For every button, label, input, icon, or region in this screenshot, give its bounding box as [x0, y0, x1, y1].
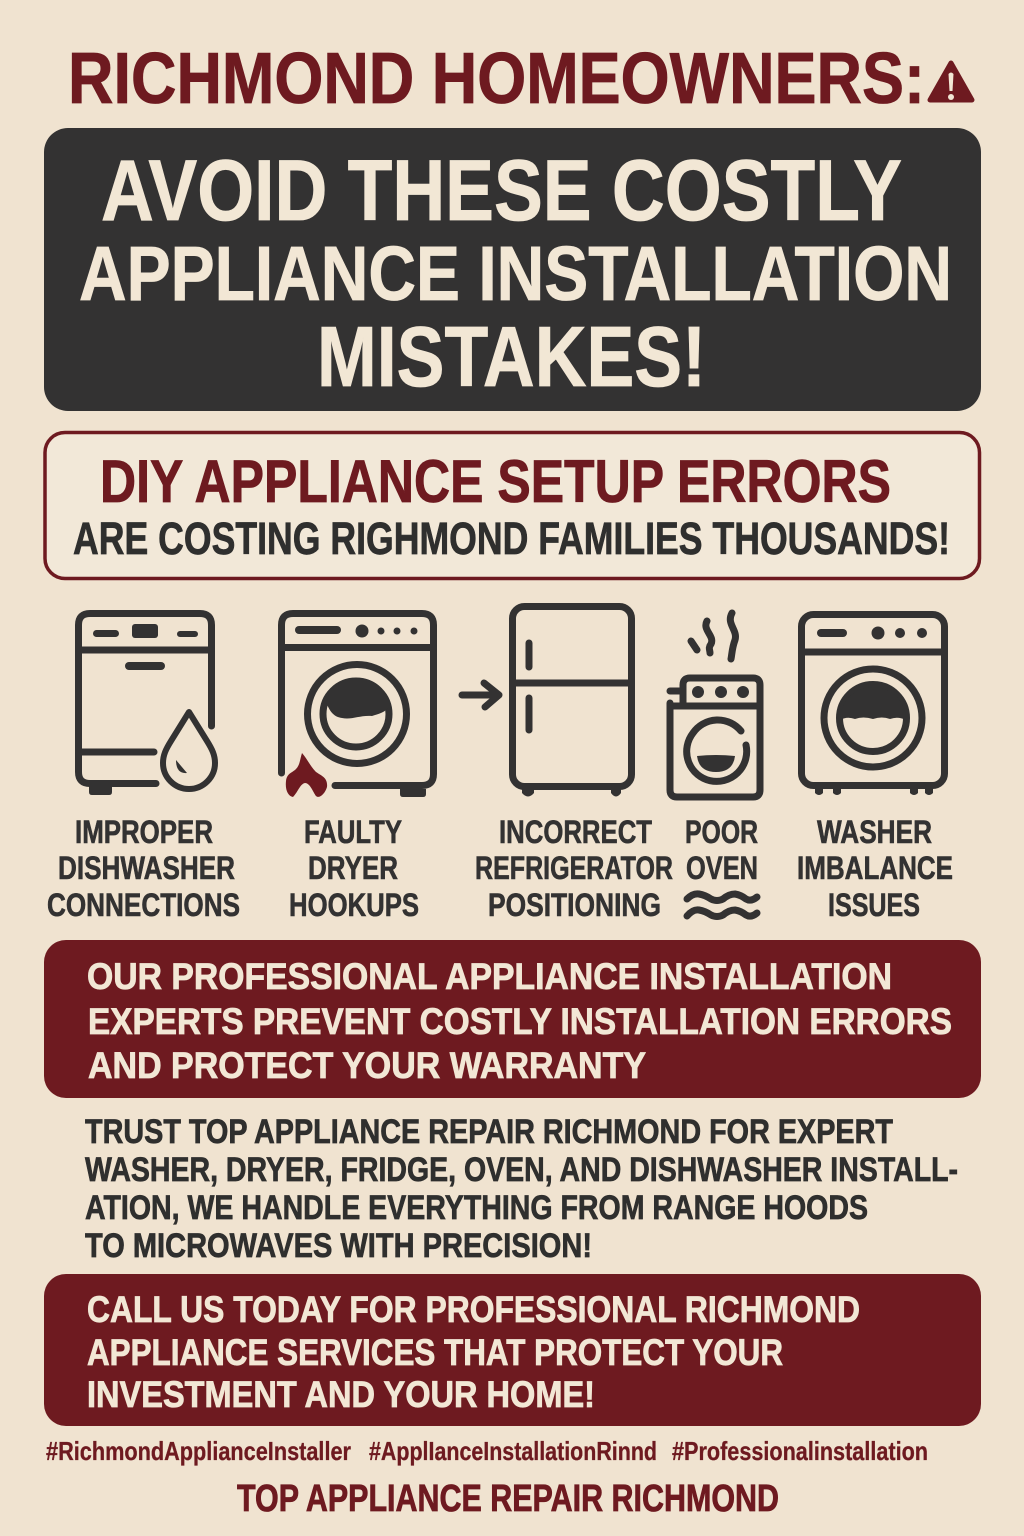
label: dryer hookups: DRYER	[308, 850, 398, 886]
label: refrigerator positioning	[475, 814, 673, 923]
panel: call to action: APPLIANCE SERVICES THAT PROTECT YOUR	[87, 1331, 783, 1373]
label: washer imbalance: ISSUES	[828, 887, 920, 923]
icon: refrigerator	[512, 606, 632, 796]
panel: headline	[44, 128, 981, 411]
title: RICHMOND HOMEOWNERS:	[68, 39, 925, 119]
panel: professional experts: OUR PROFESSIONAL APPLIANCE INSTALLATION	[87, 955, 892, 997]
hashtags: #RichmondApplianceInstaller	[46, 1436, 351, 1466]
label: washer imbalance	[797, 814, 953, 923]
icon: dryer with flame	[282, 614, 434, 797]
label: washer imbalance: IMBALANCE	[797, 850, 953, 886]
panel: headline: AVOID THESE COSTLY	[101, 143, 902, 239]
hashtags	[46, 1436, 928, 1466]
label: dishwasher connections	[47, 814, 240, 923]
icon: warning triangle	[930, 63, 972, 100]
hashtags: #Professionalinstallation	[672, 1436, 928, 1466]
label: dishwasher connections: DISHWASHER	[58, 850, 235, 886]
label: dishwasher connections: CONNECTIONS	[47, 887, 240, 923]
footer brand name: TOP APPLIANCE REPAIR RICHMOND	[237, 1478, 779, 1520]
label: poor oven: OVEN	[686, 850, 758, 886]
icon: oven with steam	[670, 613, 760, 797]
label: refrigerator positioning: POSITIONING	[488, 887, 661, 923]
panel: DIY errors callout	[45, 432, 980, 578]
panel: headline: MISTAKES!	[317, 310, 706, 405]
label: refrigerator positioning: REFRIGERATOR	[475, 850, 673, 886]
panel: DIY errors callout: DIY APPLIANCE SETUP ERRORS	[100, 448, 891, 515]
label: dryer hookups: FAULTY	[304, 814, 402, 850]
panel: call to action: CALL US TODAY FOR PROFESSIONAL RICHMOND	[87, 1288, 860, 1330]
text block: trust statement: ATION, WE HANDLE EVERYTHING FROM RANGE HOODS	[85, 1189, 868, 1227]
panel: call to action	[44, 1274, 981, 1426]
icon: flame	[286, 753, 327, 797]
label: dryer hookups: HOOKUPS	[289, 887, 419, 923]
panel: professional experts: AND PROTECT YOUR WARRANTY	[88, 1044, 646, 1086]
panel: call to action: INVESTMENT AND YOUR HOME!	[87, 1373, 595, 1415]
icon: dishwasher with water drop	[78, 614, 215, 795]
hashtags: #ApplIanceInstallationRinnd	[369, 1436, 657, 1466]
icon: washer	[802, 614, 944, 795]
label: poor oven: POOR	[685, 814, 758, 850]
label: poor oven	[685, 814, 758, 916]
label: washer imbalance: WASHER	[817, 814, 932, 850]
icon: heat waves	[687, 894, 757, 916]
panel: professional experts	[44, 940, 981, 1098]
label: dishwasher connections: IMPROPER	[75, 814, 213, 850]
text block: trust statement: TO MICROWAVES WITH PRECISION!	[85, 1227, 592, 1265]
arrow: into refrigerator	[462, 683, 499, 707]
label: dryer hookups	[289, 814, 419, 923]
label: refrigerator positioning: INCORRECT	[499, 814, 652, 850]
text block: trust statement	[85, 1113, 958, 1265]
icon: steam	[691, 613, 735, 659]
